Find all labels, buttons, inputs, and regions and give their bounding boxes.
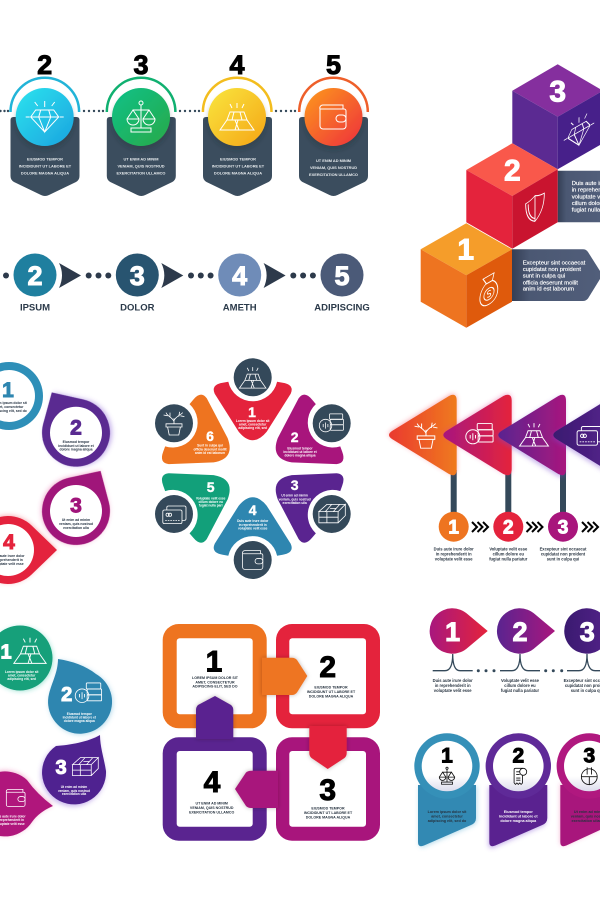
captions: Voluptate velit esse — [501, 678, 540, 683]
pin 1: 1 — [2, 379, 14, 402]
pin 2: Eiusmod tempor — [63, 440, 90, 444]
pin 3: Ut enim ad minim — [62, 518, 90, 522]
petal labels: 5 — [207, 479, 215, 495]
number circles — [439, 512, 578, 542]
badge 2: INCIDIDUNT UT LABORE ET — [19, 164, 72, 168]
step 3: 3 — [130, 261, 145, 291]
petal labels: Ut enim ad minim — [281, 494, 308, 498]
captions: Voluptate velit esse — [489, 546, 528, 552]
petal labels: Duis aute irure dolor — [237, 519, 269, 523]
badge 4: 4 — [229, 50, 245, 80]
panel: numbered badge timeline — [0, 50, 368, 196]
square labels: UT ENIM AD MINIM — [195, 802, 228, 806]
square labels: 4 — [204, 766, 221, 799]
pin 2: dolore magna aliqua — [60, 448, 93, 452]
drop 1: amet, consectetur — [8, 674, 36, 678]
drop 2: Eiusmod tempor — [67, 712, 93, 716]
drop 1: adipiscing elit, sed — [7, 677, 36, 681]
cube 3: 3 — [549, 76, 566, 109]
badge 2: EIUSMOD TEMPOR — [27, 156, 63, 162]
petal labels: cillum dolore eu — [198, 500, 223, 504]
square labels: ADIPISCING ELIT, SED DO — [192, 684, 238, 688]
captions: sunt in culpa qui — [547, 556, 579, 562]
triangle 3 — [498, 395, 566, 475]
square labels: DOLORE MAGNA ALIQUA — [309, 694, 354, 698]
tag 1 — [414, 733, 480, 846]
captions: in reprehenderit in — [436, 552, 472, 556]
tag 2: incididunt ut labore et — [499, 814, 538, 818]
badge 4: DOLORE MAGNA ALIQUA — [214, 170, 262, 176]
drop 1: 1 — [0, 642, 12, 664]
drop 3: 3 — [55, 757, 67, 779]
square labels: 1 — [206, 646, 222, 678]
pin 2: incididunt ut labore et — [58, 444, 95, 448]
badge 4 — [203, 50, 272, 196]
captions — [434, 546, 600, 562]
drop 1: Lorem ipsum dolor sit — [5, 670, 39, 674]
badge 3 — [107, 50, 176, 196]
captions — [433, 678, 600, 693]
petal labels: Voluptate velit esse — [196, 496, 226, 500]
timeline dots — [0, 110, 296, 112]
captions: Duis aute irure dolor — [433, 678, 473, 683]
text card 2 — [558, 171, 600, 222]
cube 2: 2 — [504, 155, 521, 188]
petal labels: dolore magna aliqua — [284, 454, 316, 458]
badge 2: DOLORE MAGNA ALIQUA — [21, 170, 69, 176]
badge 3: EXERCITATION ULLAMCO — [117, 170, 165, 176]
tag 1: 1 — [441, 744, 453, 768]
badge 2: 2 — [37, 50, 52, 80]
step 4: 4 — [232, 261, 247, 291]
tag 2: Eiusmod tempor — [504, 810, 533, 814]
number circles: 3 — [558, 518, 568, 538]
arrow 3 to 4 — [235, 771, 278, 808]
square labels: INCIDIDUNT UT LABORE ET — [304, 811, 353, 815]
drop 2: dolore magna aliqua — [64, 719, 95, 723]
drop 2: incididunt ut labore et — [63, 716, 97, 720]
panel: overlapping triangles timeline — [389, 395, 600, 562]
petal labels: in reprehenderit in — [239, 523, 267, 527]
arrows — [59, 263, 286, 288]
text card 1: anim id est laborum — [523, 286, 574, 292]
pin 3 — [29, 453, 130, 558]
step 2: IPSUM — [20, 302, 50, 314]
tag 1: amet, consectetur — [431, 814, 463, 818]
captions: cillum dolore eu — [504, 683, 536, 688]
stems — [451, 470, 566, 514]
square labels: AMET, CONSECTETUR — [195, 680, 235, 684]
square 3 — [276, 737, 380, 841]
badge 3: UT ENIM AD MINIM — [123, 156, 159, 162]
petal labels: Sunt in culpa qui — [197, 444, 223, 448]
badge 5: EXERCITATION ULLAMCO — [309, 172, 358, 177]
petal labels: anim id est laborum — [195, 451, 225, 455]
step 2: 2 — [27, 261, 43, 291]
petal labels: incididunt ut labore et — [283, 450, 318, 454]
arrow 4 to 1 — [196, 696, 233, 739]
pin step 3 — [564, 608, 600, 654]
chevrons — [472, 522, 598, 532]
pin step 2 — [497, 608, 555, 654]
step 5 — [314, 254, 370, 314]
pin step 2: 2 — [512, 617, 528, 647]
connector dots — [477, 669, 563, 672]
tag 2: dolore magna aliqua — [500, 819, 537, 823]
captions: fugiat nulla pariatur — [489, 556, 528, 562]
petal labels: Lorem ipsum dolor sit — [236, 419, 270, 423]
panel: linked rounded squares — [163, 624, 380, 841]
drop 3 — [42, 735, 106, 804]
step 4 — [218, 254, 261, 314]
square labels: EIUSMOD TEMPOR — [311, 806, 345, 810]
petal labels — [193, 404, 318, 531]
petal labels: veniam, quis nostrud — [279, 497, 311, 501]
step 4: AMETH — [223, 302, 257, 314]
petal labels: exercitation ulla — [283, 501, 307, 505]
badge 5: VENIAM, QUIS NOSTRUD — [310, 165, 357, 170]
step 5: 5 — [334, 261, 350, 291]
cube 2 — [466, 143, 558, 249]
pin 2: 2 — [70, 416, 82, 440]
text card 1: Excepteur sint occaecat — [523, 260, 586, 266]
step 3: DOLOR — [120, 302, 155, 314]
petal labels: 3 — [291, 477, 299, 493]
tag 3 — [557, 733, 600, 846]
badge 4: EIUSMOD TEMPOR — [220, 156, 256, 162]
petals — [158, 382, 348, 556]
badge 3: VENIAM, QUIS NOSTRUD — [117, 164, 165, 168]
badge 2 — [10, 50, 80, 196]
square labels: EIUSMOD TEMPOR — [314, 686, 348, 690]
square labels: VENIAM, QUIS NOSTRUD — [190, 806, 234, 810]
petal labels: voluptate velit esse — [238, 527, 268, 531]
petal labels: 1 — [248, 404, 256, 420]
square labels — [189, 646, 356, 820]
number circles: 2 — [503, 518, 514, 538]
square 4 — [163, 737, 267, 841]
tag 1: Lorem ipsum dolor sit — [428, 810, 467, 814]
text card 1: sunt in culpa qui — [523, 274, 565, 280]
petal labels: fugiat nulla pari — [199, 504, 223, 508]
tag 2 — [486, 733, 551, 846]
panel: six petal cycle — [155, 358, 351, 579]
petal labels: Eiusmod tempor — [287, 446, 313, 450]
icon discs — [155, 358, 351, 579]
step 5: ADIPISCING — [314, 302, 370, 314]
captions: fugiat nulla pariatur — [501, 688, 540, 693]
panel: tag cards — [414, 733, 600, 846]
square labels: 3 — [319, 774, 336, 807]
square labels: EXERCITATION ULLAMCO — [189, 810, 234, 814]
step dots — [3, 272, 316, 278]
captions: voluptate velit esse — [435, 556, 473, 562]
step 3 — [116, 254, 159, 314]
pin 1 — [0, 362, 43, 430]
arrow 1 to 2 — [262, 658, 307, 695]
text card 1 — [512, 249, 600, 301]
pin 3: 3 — [70, 494, 82, 518]
petal labels: amet, consectetur — [239, 423, 267, 427]
drop 3: Ut enim ad minim — [61, 785, 87, 789]
panel: pin timeline — [430, 608, 600, 693]
tag 2: 2 — [512, 744, 524, 768]
triangle 4 — [553, 395, 600, 475]
tag 1: adipiscing elit, sed do — [428, 819, 467, 823]
panel: solid teardrops — [0, 626, 112, 836]
panel: numbered circles with arrows — [3, 254, 370, 314]
captions: in reprehenderit in — [435, 683, 471, 688]
badge 5: UT ENIM AD MINIM — [316, 158, 351, 163]
petal labels: 2 — [291, 429, 299, 445]
triangle 1 — [389, 395, 457, 475]
cube 3 — [512, 64, 600, 169]
arrow 2 to 3 — [309, 726, 347, 769]
pin 4 — [0, 516, 57, 584]
badge 5: 5 — [326, 50, 341, 80]
square 1 — [163, 624, 267, 728]
pin step 1: 1 — [445, 617, 460, 647]
petal labels: 4 — [249, 502, 257, 518]
panel: isometric cube staircase — [421, 64, 600, 328]
petal labels: adipiscing elit, sed — [238, 426, 267, 430]
triangle 2 — [443, 395, 512, 475]
drop 3: exercitation ulla — [62, 792, 86, 796]
square labels: 2 — [319, 651, 336, 684]
square labels: LOREM IPSUM DOLOR SIT — [192, 676, 239, 680]
badge 4: INCIDIDUNT UT LABORE ET — [212, 164, 265, 168]
pin 2 — [23, 375, 123, 479]
square labels: DOLORE MAGNA ALIQUA — [306, 816, 351, 820]
pin step 3: 3 — [580, 617, 595, 647]
number circles: 1 — [448, 518, 459, 538]
captions: voluptate velit esse — [434, 688, 472, 693]
captions: Duis aute irure dolor — [434, 546, 474, 552]
badge 5 — [299, 50, 368, 196]
captions: Excepteur sint occaecat — [540, 546, 587, 552]
pin 3: exercitation ulla — [63, 526, 89, 530]
square 2 — [276, 624, 380, 728]
pin 3: veniam, quis nostrud — [59, 522, 93, 526]
square labels: INCIDIDUNT UT LABORE ET — [307, 690, 356, 694]
drop 2: 2 — [61, 684, 72, 706]
petal labels: 6 — [206, 428, 214, 444]
text card 1: officia deserunt mollit — [523, 280, 578, 286]
drop 3: veniam, quis nostrud — [58, 789, 90, 793]
petal labels: officia deserunt mollit — [193, 448, 227, 452]
pin 4: 4 — [3, 531, 15, 554]
captions: cupidatat non proident — [541, 552, 586, 556]
pin step 1 — [430, 608, 488, 654]
tag 3: 3 — [583, 744, 595, 768]
captions: cillum dolore eu — [493, 552, 524, 556]
drop 4 — [0, 771, 53, 836]
cube 1 — [421, 223, 512, 328]
step 2 — [14, 254, 56, 314]
text card 1: cupidatat non proident — [523, 267, 581, 273]
drop 1 — [0, 626, 52, 690]
connector lines — [433, 654, 600, 671]
badge 3: 3 — [133, 50, 149, 80]
cube 1: 1 — [457, 233, 474, 266]
drop 2 — [48, 659, 112, 734]
icons — [163, 367, 345, 569]
panel: ring pins — [0, 362, 130, 584]
